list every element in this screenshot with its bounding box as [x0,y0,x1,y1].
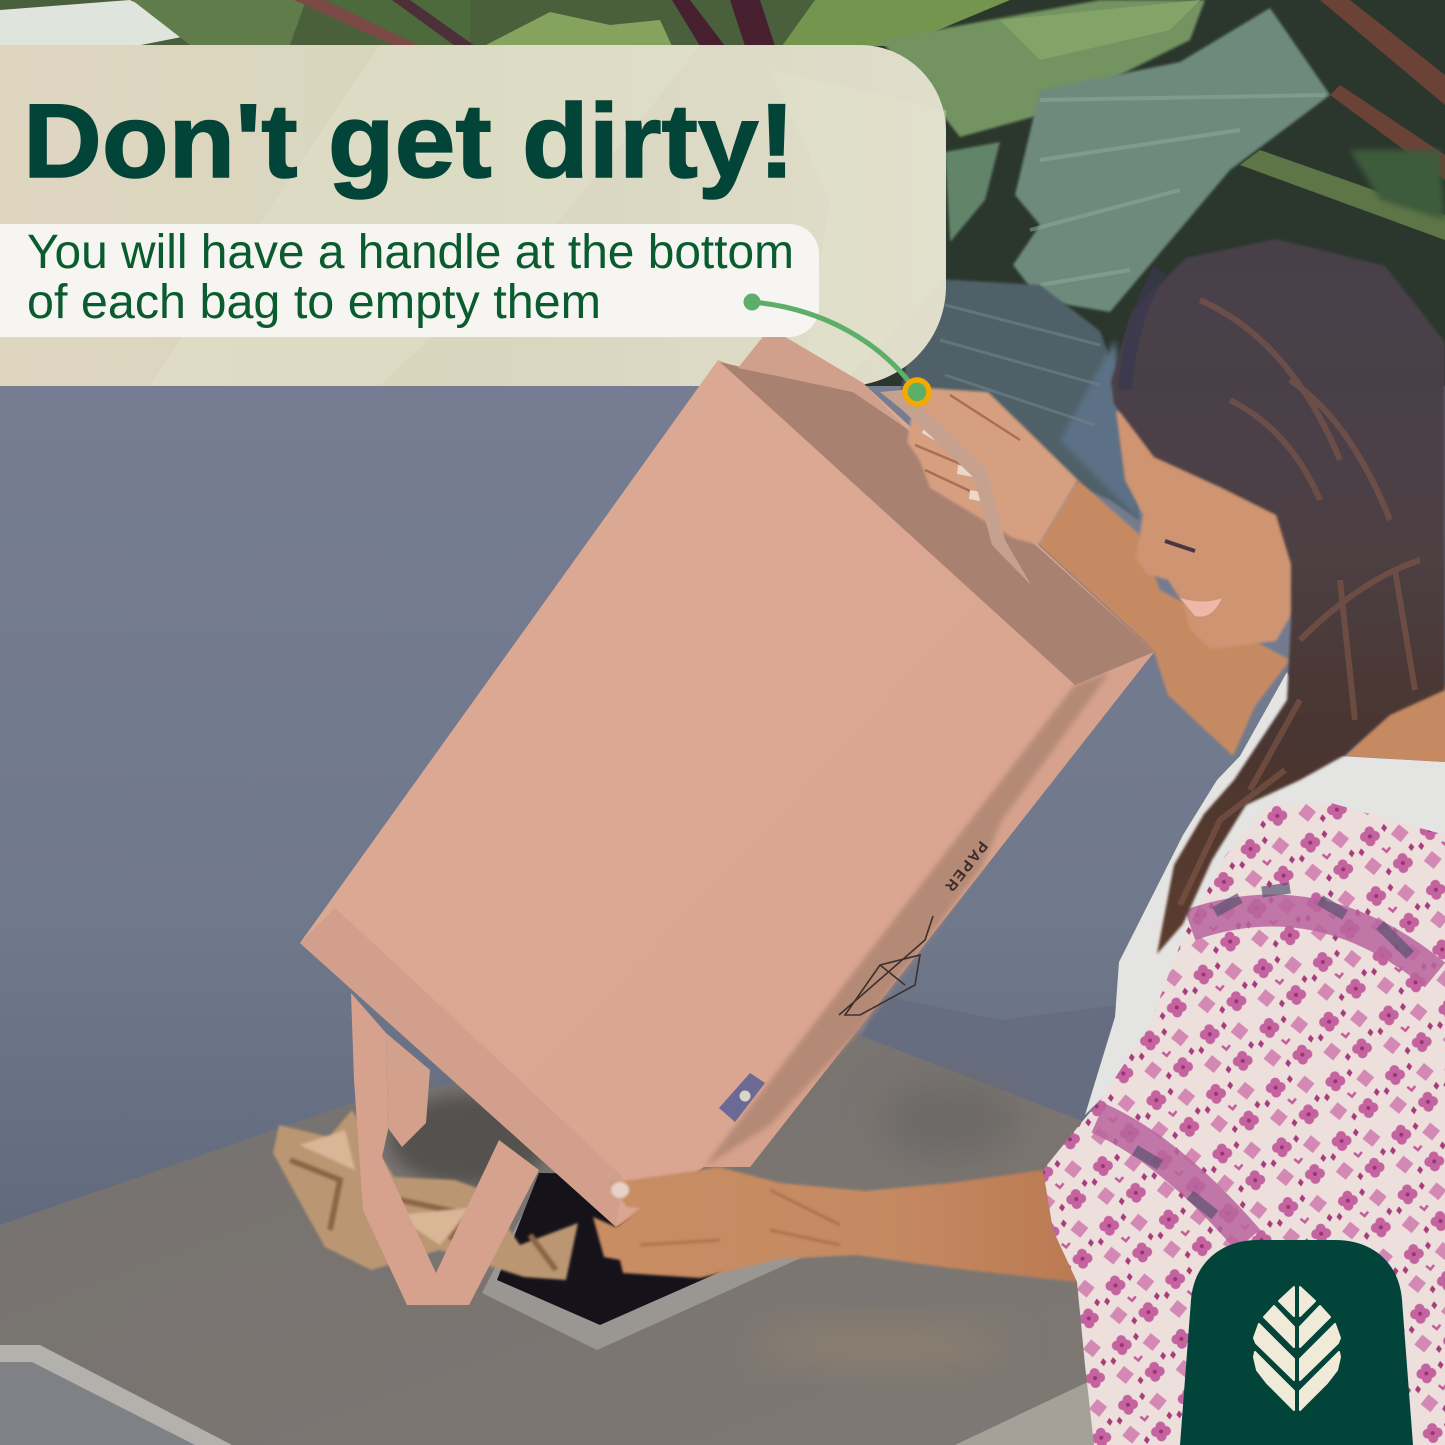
icon: leaf [1254,1287,1340,1410]
bag top fold [720,362,1154,685]
upper hand [907,388,1078,545]
neck [1345,685,1445,762]
plant backdrop [0,0,1445,520]
hair [1111,239,1445,954]
sink [0,1345,232,1445]
bag bottom hem [300,908,623,1227]
face [1116,411,1300,649]
woman's lower arm and hand [593,1167,1077,1282]
crumpled paper [273,1110,578,1280]
bag side icon [839,916,933,1015]
disposal hole [482,1173,803,1350]
patterned kimono [1043,803,1445,1445]
bag brand tag [719,1073,765,1122]
subtitle text: You will have a handle at the bottom [27,226,794,279]
bag side print: PAPER [940,838,991,896]
bag handles at the bottom [351,993,539,1305]
wall [0,380,1445,1280]
kimono bands [1098,911,1435,1240]
upper arm [1039,480,1290,756]
counter [0,1034,1098,1445]
callout backdrop panel [0,45,946,386]
hair strands [1180,300,1420,905]
top strap [880,390,1031,585]
bag side panel [704,652,1154,1167]
fingernails [922,425,986,502]
title: Don't get dirty! [23,83,795,200]
brand tab with leaf logo [1180,1240,1413,1445]
subtitle text: of each bag to empty them [27,276,601,329]
subtitle pill [0,224,819,337]
smile [1180,598,1222,617]
paper bag [300,328,1154,1227]
icon: tag leaf [740,1090,750,1102]
short strap [386,1033,430,1147]
panel leaf tint [150,45,946,386]
white top [1085,672,1445,1115]
long strap [351,993,539,1305]
bag front face [300,328,1154,1227]
woman [880,239,1445,1445]
callout pointer to handle [744,294,929,404]
right wall with pot shadow [860,995,1120,1122]
